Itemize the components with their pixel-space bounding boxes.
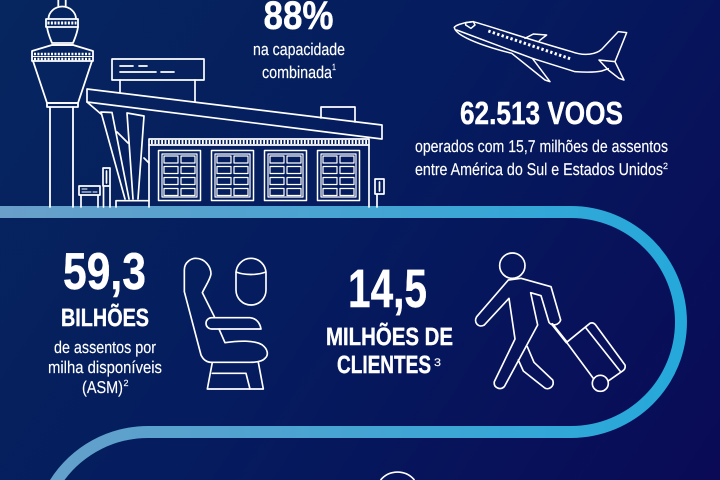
stat: seat miles: milha disponíveis xyxy=(48,358,162,377)
stat: customers: CLIENTES xyxy=(337,351,431,379)
windows xyxy=(158,150,360,200)
stat: seat miles xyxy=(48,243,162,397)
stat: flights: operados com 15,7 milhões de assentos xyxy=(415,137,668,156)
icon: control tower xyxy=(32,0,93,207)
icon: terminal building xyxy=(79,59,384,207)
stat: customers: 3 xyxy=(434,357,441,369)
stat: seat miles: BILHÕES xyxy=(61,303,149,332)
icon: traveller with suitcase xyxy=(476,253,625,391)
stat: seat miles: (ASM) xyxy=(82,378,123,397)
stat: customers: MILHÕES DE xyxy=(326,322,453,351)
stat: customers xyxy=(326,259,453,379)
stat: seat miles: 2 xyxy=(124,378,128,388)
stat: flights: entre América do Sul e Estados Unidos xyxy=(415,160,663,179)
small sign and posts xyxy=(79,186,100,207)
roof xyxy=(87,89,382,139)
ribbon path xyxy=(0,206,687,480)
stat: seat miles: 59,3 xyxy=(63,243,146,301)
stat: capacity: combinada xyxy=(262,63,332,82)
stat: flights: 62.513 VOOS xyxy=(460,95,623,131)
stat: customers: 14,5 xyxy=(348,259,427,319)
stat: flights xyxy=(415,95,668,179)
stat: capacity xyxy=(253,0,345,82)
icon: airplane seat xyxy=(184,258,267,389)
icon: partially visible circle xyxy=(381,472,414,480)
columns xyxy=(87,102,149,199)
icon: airplane xyxy=(454,22,627,82)
stat: capacity: na capacidade xyxy=(253,40,345,59)
stat: capacity: 1 xyxy=(332,62,336,72)
stat: flights: 2 xyxy=(663,161,668,171)
stat: seat miles: de assentos por xyxy=(54,338,156,357)
facade xyxy=(149,139,369,207)
rooftop sign xyxy=(112,59,204,102)
